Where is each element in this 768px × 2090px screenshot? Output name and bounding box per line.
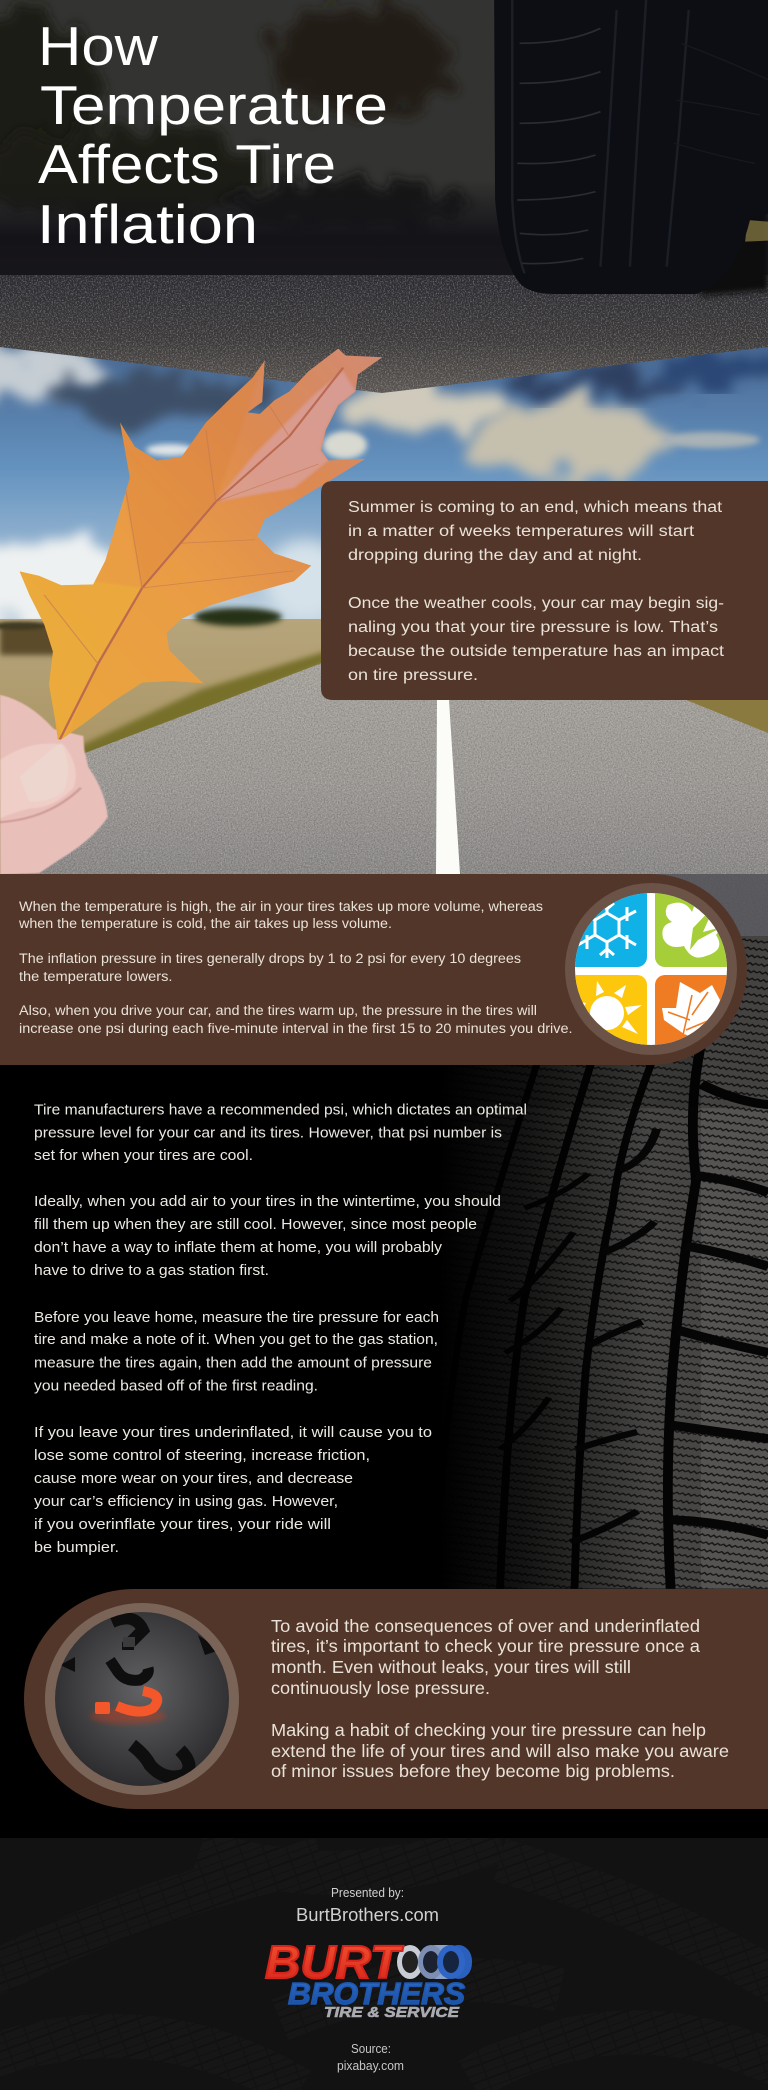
tire advice text: your car’s efficiency in using gas. However,	[34, 1494, 338, 1510]
intro text: on tire pressure.	[348, 667, 478, 684]
orange question mark	[90, 1691, 166, 1724]
tire advice text	[34, 1102, 527, 1556]
tire advice text: you needed based off of the first reading.	[34, 1378, 318, 1394]
intro text: dropping during the day and at night.	[348, 547, 642, 564]
tire tread photo	[474, 936, 768, 1589]
title: How	[38, 15, 158, 77]
leaf held in hand	[0, 340, 392, 875]
shadow right of tire	[700, 200, 768, 296]
tire advice text: pressure level for your car and its tires. However, that psi number is	[34, 1126, 502, 1142]
road centre line	[436, 700, 460, 874]
leaf blade	[20, 348, 382, 740]
maple leaf	[662, 982, 720, 1040]
source credit: Source:	[351, 2042, 391, 2056]
band text: increase one psi during each five-minute interval in the first 15 to 20 minutes you drive.	[19, 1021, 572, 1036]
asphalt foreground	[0, 275, 768, 393]
title: Affects Tire	[38, 133, 336, 195]
band text: the temperature lowers.	[19, 969, 172, 984]
maintenance text: of minor issues before they become big problems.	[271, 1761, 675, 1781]
title: Inflation	[37, 193, 258, 255]
clouds in the sky	[0, 344, 768, 640]
maintenance text: extend the life of your tires and will also make you aware	[271, 1741, 729, 1761]
hibiscus flower	[662, 902, 720, 958]
maintenance band	[24, 1589, 768, 1809]
maintenance text: continuously lose pressure.	[271, 1678, 490, 1698]
intro text: naling you that your tire pressure is low. That’s	[348, 619, 718, 636]
band text: The inflation pressure in tires generally drops by 1 to 2 psi for every 10 degrees	[19, 951, 521, 966]
footer background with tires	[0, 1838, 768, 2090]
tire advice text: Ideally, when you add air to your tires in the wintertime, you should	[34, 1194, 501, 1210]
tire advice text: have to drive to a gas station first.	[34, 1263, 269, 1279]
presenter credit	[296, 1886, 439, 1925]
icon: four seasons	[565, 883, 737, 1055]
tire advice text: If you leave your tires underinflated, it will cause you to	[34, 1425, 432, 1441]
road	[0, 630, 768, 936]
top photo: tire on asphalt	[0, 0, 768, 393]
hand	[0, 695, 108, 875]
tire advice text: lose some control of steering, increase friction,	[34, 1448, 370, 1464]
logo: Burt Brothers: BURT	[265, 1936, 404, 1988]
band text: Also, when you drive your car, and the tires warm up, the pressure in the tires will	[19, 1003, 537, 1018]
maintenance text: To avoid the consequences of over and underinflated	[271, 1616, 700, 1636]
intro text	[348, 499, 725, 684]
field	[0, 619, 768, 940]
tire advice text: if you overinflate your tires, your ride will	[34, 1517, 331, 1533]
tire advice text: measure the tires again, then add the amount of pressure	[34, 1356, 432, 1372]
tire advice text: Tire manufacturers have a recommended psi, which dictates an optimal	[34, 1102, 527, 1118]
intro text: Summer is coming to an end, which means that	[348, 499, 723, 516]
maintenance text: Making a habit of checking your tire pressure can help	[271, 1720, 706, 1740]
source credit	[337, 2042, 404, 2073]
tire advice text: tire and make a note of it. When you get to the gas station,	[34, 1332, 438, 1348]
title	[37, 15, 388, 255]
band text: When the temperature is high, the air in your tires takes up more volume, whereas	[19, 899, 543, 914]
tire	[494, 0, 768, 294]
intro text: Once the weather cools, your car may begin sig-	[348, 595, 724, 612]
band text: when the temperature is cold, the air takes up less volume.	[18, 916, 392, 931]
intro text: in a matter of weeks temperatures will start	[348, 523, 695, 540]
maintenance text: month. Even without leaks, your tires will still	[271, 1657, 631, 1677]
logo: Burt Brothers	[265, 1936, 472, 2021]
tire advice text: Before you leave home, measure the tire pressure for each	[34, 1310, 439, 1326]
dim background trees	[0, 5, 768, 276]
snowflake	[578, 900, 636, 958]
logo: Burt Brothers: TIRE & SERVICE	[324, 2005, 461, 2021]
tire advice text: be bumpier.	[34, 1540, 119, 1556]
title: Temperature	[40, 74, 388, 136]
sun	[582, 981, 642, 1034]
wheels	[397, 1945, 472, 1979]
temperature band	[0, 874, 747, 1065]
intro text: because the outside temperature has an impact	[348, 643, 725, 660]
tire advice text: don’t have a way to inflate them at home, you will probably	[34, 1240, 443, 1256]
presenter credit: Presented by:	[331, 1886, 404, 1900]
landscape photo: sky, field and road	[0, 340, 768, 940]
icon: question marks	[45, 1603, 239, 1795]
logo: Burt Brothers: BROTHERS	[288, 1976, 465, 2011]
source credit: pixabay.com	[337, 2059, 404, 2073]
presenter credit: BurtBrothers.com	[296, 1904, 439, 1925]
band text	[18, 899, 573, 1036]
tire advice text: cause more wear on your tires, and decrease	[34, 1471, 353, 1487]
tire advice text: fill them up when they are still cool. However, since most people	[34, 1217, 477, 1233]
tire advice text: set for when your tires are cool.	[34, 1148, 253, 1164]
maintenance text	[271, 1616, 729, 1781]
intro card	[321, 481, 768, 700]
maintenance text: tires, it’s important to check your tire pressure once a	[271, 1636, 700, 1656]
